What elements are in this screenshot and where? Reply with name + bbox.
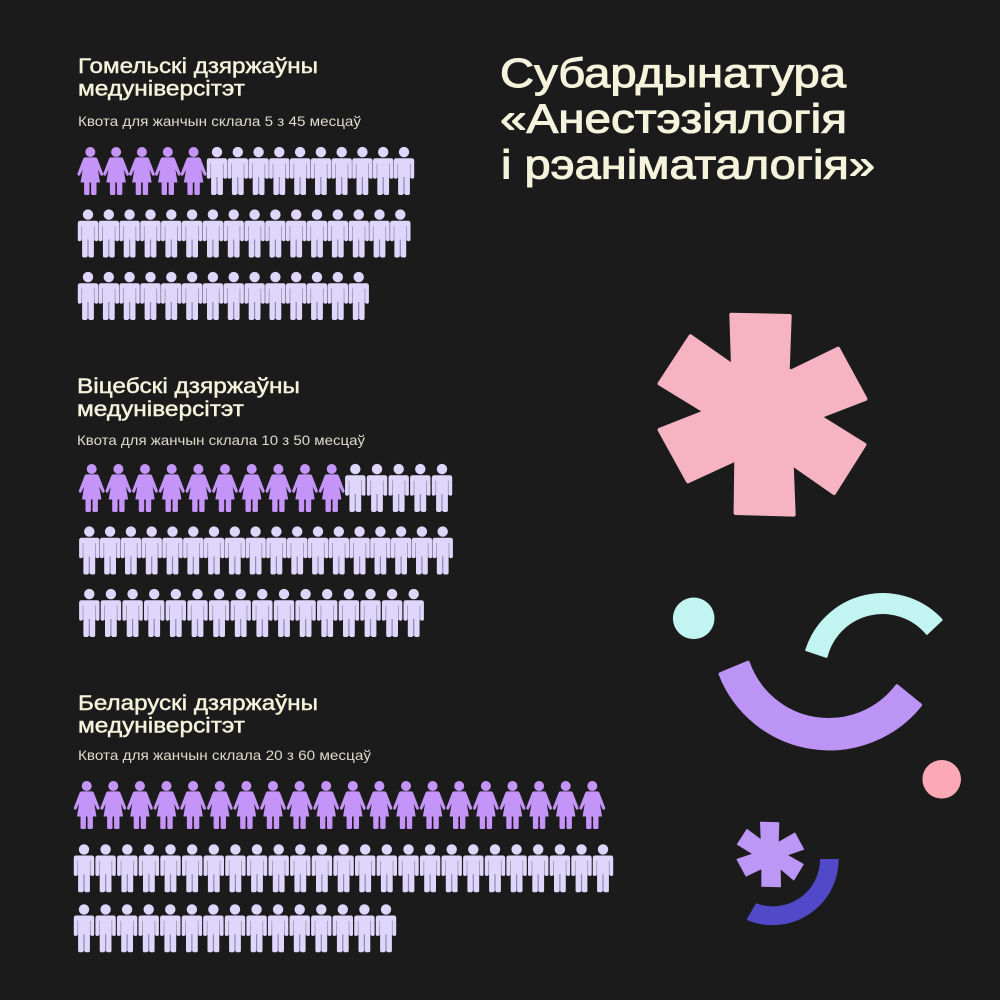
title: і рэаніматалогія» <box>501 141 875 187</box>
heading: Gomel <box>78 55 318 100</box>
title: «Анестэзіялогія <box>500 96 847 142</box>
icon row: 14 men <box>78 272 369 320</box>
heading: Belarusian <box>78 692 318 738</box>
quota text: Vitebsk: Квота для жанчын склала 10 з 50 месцаў <box>77 432 365 448</box>
heading: Vitebsk: медуніверсітэт <box>77 398 244 421</box>
heading: Vitebsk: Віцебскі дзяржаўны <box>77 375 300 398</box>
title: Субардынатура <box>500 50 846 96</box>
heading: Vitebsk <box>77 375 300 421</box>
icon row: 16 men <box>78 209 411 258</box>
heading: Gomel: Гомельскі дзяржаўны <box>78 55 318 78</box>
quota text: Gomel: Квота для жанчын склала 5 з 45 месцаў <box>78 113 361 129</box>
icon: cyan arc <box>806 594 941 657</box>
icon: cyan circle <box>673 598 714 639</box>
icon row: 10 women and 5 men <box>79 464 452 512</box>
title <box>500 50 875 187</box>
icon: large pink asterisk <box>660 315 865 515</box>
icon row: 5 women and 10 men <box>77 147 414 195</box>
icon row: 15 men <box>74 904 396 952</box>
icon row: 25 men <box>74 844 613 892</box>
heading: Belarusian: медуніверсітэт <box>78 714 245 738</box>
heading: Gomel: медуніверсітэт <box>78 78 245 100</box>
panel: Belarusian university <box>74 692 613 952</box>
icon: purple arc <box>720 662 920 749</box>
icon row: 16 men <box>79 589 424 637</box>
heading: Belarusian: Беларускі дзяржаўны <box>78 692 318 715</box>
icon: blue arc <box>747 860 838 925</box>
icon: pink circle <box>922 760 961 799</box>
quota text: Belarusian: Квота для жанчын склала 20 з 60 месцаў <box>78 747 371 763</box>
icon row: 20 women <box>74 781 605 829</box>
panel: Gomel university <box>77 55 414 320</box>
icon: small purple asterisk <box>737 822 804 887</box>
icon row: 18 men <box>79 526 453 574</box>
panel: Vitebsk university <box>77 375 453 637</box>
